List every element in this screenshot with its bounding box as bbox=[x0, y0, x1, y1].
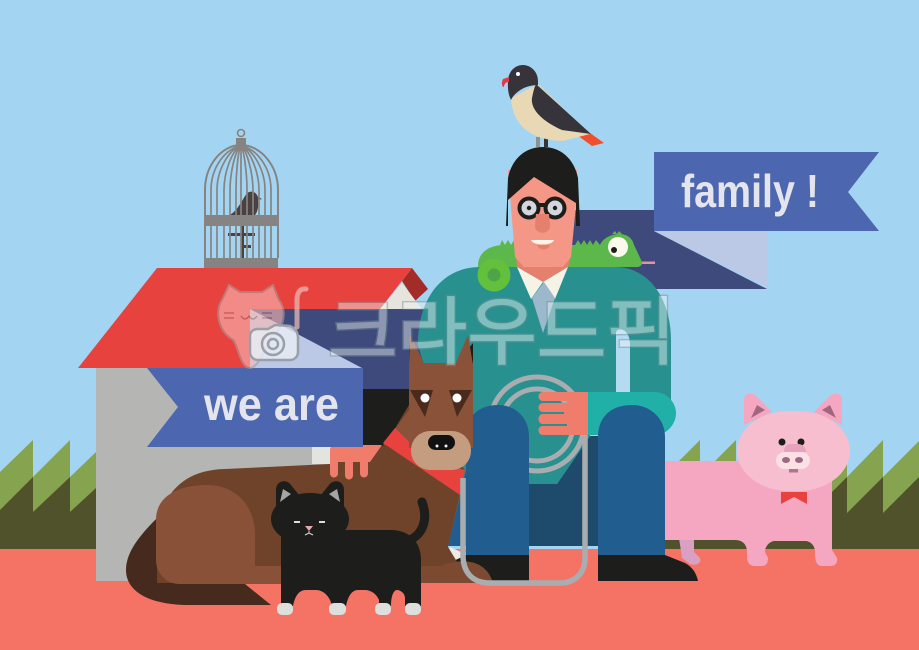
pig back leg bbox=[679, 538, 700, 565]
man bbox=[418, 147, 698, 581]
dog muzzle bbox=[411, 431, 471, 470]
petting hand bbox=[330, 445, 382, 480]
collar bbox=[517, 267, 543, 299]
right hedge bbox=[664, 440, 919, 549]
ribbon text: we are: we are bbox=[203, 378, 339, 430]
house bbox=[78, 268, 428, 581]
cat ears bbox=[276, 481, 344, 510]
cat head bbox=[271, 493, 349, 545]
watermark brand text: 크라우드픽 bbox=[328, 291, 676, 374]
pig eyes bbox=[778, 438, 786, 446]
cat tail bbox=[410, 502, 425, 540]
jacket bbox=[418, 267, 671, 484]
hair bbox=[506, 147, 580, 226]
sleeve bbox=[586, 392, 676, 435]
cat face bbox=[294, 521, 325, 535]
dog tail bbox=[126, 517, 271, 605]
bird wing bbox=[532, 84, 591, 134]
neck bbox=[516, 255, 571, 282]
tie bbox=[532, 282, 555, 333]
arm gap bbox=[616, 329, 630, 392]
sock bbox=[444, 547, 470, 563]
ground bbox=[0, 549, 919, 650]
white cuff bbox=[312, 447, 332, 464]
birdcage bbox=[204, 130, 278, 268]
pig ears bbox=[744, 393, 772, 425]
cat paws bbox=[277, 603, 421, 615]
cat bbox=[271, 481, 425, 615]
pig head bbox=[737, 411, 850, 491]
bird head bbox=[508, 65, 538, 100]
glasses bbox=[520, 198, 564, 218]
dog eyes bbox=[410, 390, 433, 417]
left trouser leg bbox=[466, 405, 529, 555]
bird legs bbox=[536, 137, 540, 147]
bird body bbox=[511, 84, 590, 141]
pig body bbox=[665, 461, 837, 566]
watermark cat bbox=[218, 285, 284, 368]
dog neck bbox=[383, 410, 411, 445]
dog body bbox=[157, 405, 470, 583]
concentric hoops bbox=[490, 377, 584, 471]
dog nose bbox=[428, 435, 455, 450]
face bbox=[508, 170, 577, 267]
hand on knee bbox=[538, 392, 588, 435]
bird on head bbox=[502, 65, 604, 147]
nose bbox=[535, 214, 550, 233]
mouth bbox=[531, 240, 554, 244]
chair frame bbox=[463, 435, 585, 583]
watermark camera bbox=[250, 325, 298, 360]
bird beak bbox=[502, 77, 509, 87]
chameleon bbox=[478, 231, 655, 292]
right trouser leg bbox=[598, 405, 665, 555]
watermark brand text: 크라우드픽 bbox=[328, 291, 676, 374]
dog haunch bbox=[156, 485, 290, 584]
ribbon text: family: family ! bbox=[681, 165, 819, 217]
crotch shadow bbox=[529, 436, 598, 546]
right shoe bbox=[598, 555, 698, 581]
ribbon: family bbox=[570, 152, 879, 289]
cat body bbox=[281, 530, 421, 606]
dog bbox=[126, 335, 493, 605]
ribbon: we are bbox=[147, 368, 363, 447]
caged bird bbox=[228, 192, 262, 258]
left shoe bbox=[445, 555, 529, 581]
pig bbox=[665, 393, 850, 566]
watermark bracket bbox=[297, 289, 306, 327]
dog collar bbox=[383, 428, 465, 495]
dog ears bbox=[409, 345, 425, 365]
dog paw bbox=[290, 561, 493, 583]
dog head bbox=[409, 363, 473, 448]
bird tail bbox=[577, 133, 604, 146]
watermark bbox=[218, 285, 676, 374]
pig snout bbox=[784, 444, 806, 452]
left hedge bbox=[0, 440, 96, 549]
pig bow tie bbox=[781, 492, 807, 504]
